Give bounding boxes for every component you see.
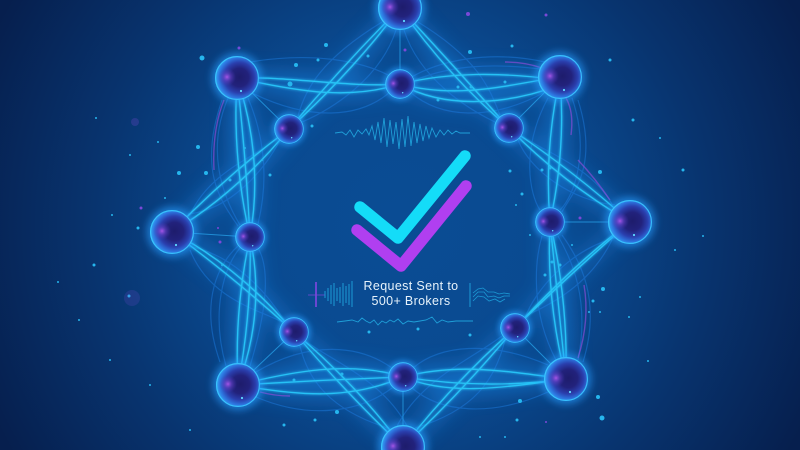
inner nodes [233, 67, 567, 394]
bottom waveform [337, 317, 473, 325]
faint blue ribbons [186, 22, 615, 428]
left audio waveform [308, 281, 352, 307]
request text: Request Sent to [364, 279, 458, 293]
request text: 500+ Brokers [372, 294, 450, 308]
right line chart [470, 283, 510, 307]
particles [57, 43, 704, 438]
network connection lines [172, 8, 630, 447]
violet arc accents [214, 62, 610, 396]
request text [364, 279, 458, 308]
cyan tick [360, 156, 465, 238]
outer nodes [147, 0, 655, 450]
top waveform [335, 116, 470, 149]
purple tick [357, 186, 466, 266]
violet particles [124, 12, 582, 423]
thin short links from outer to inner nodes [172, 8, 630, 447]
checkmark [357, 156, 466, 266]
network glow haze [172, 8, 630, 447]
